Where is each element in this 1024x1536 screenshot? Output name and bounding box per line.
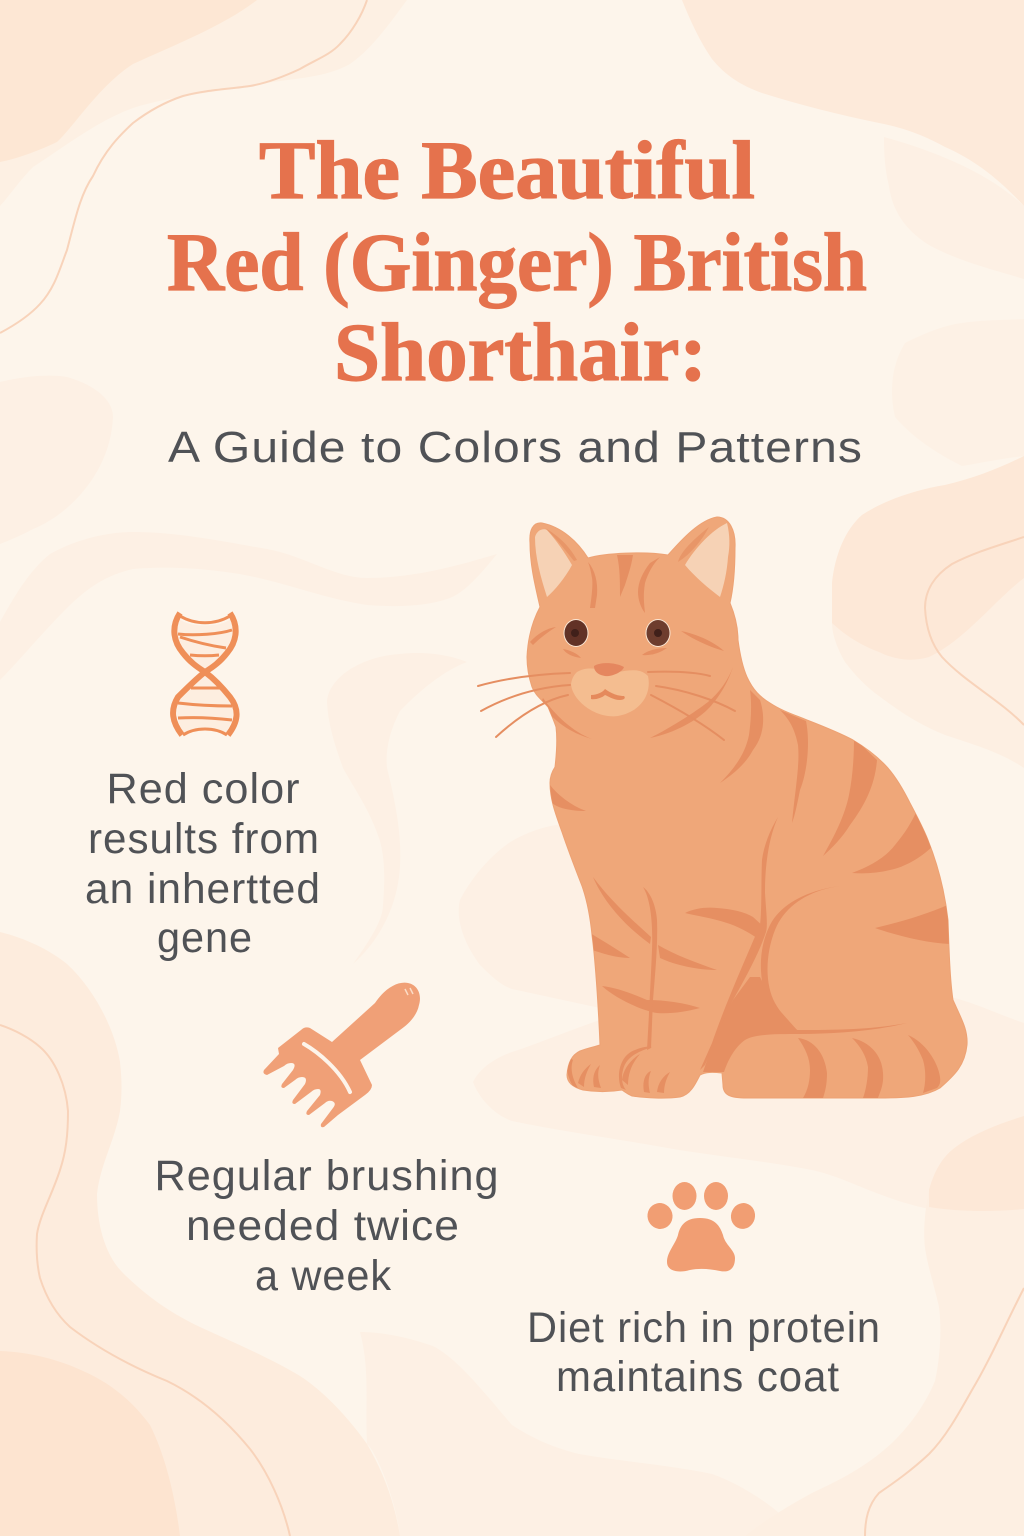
text: red color gene: Red color: [106, 765, 300, 813]
text: brushing: needed twice: [186, 1202, 460, 1250]
text: brushing: [154, 1152, 500, 1300]
text: red color gene: gene: [157, 914, 253, 962]
cat muzzle: [571, 668, 649, 716]
cat ears: [535, 523, 729, 597]
subtitle: A Guide to Colors and Patterns: [168, 423, 863, 472]
cat nose: [594, 663, 624, 676]
cat stripes: [530, 555, 950, 1098]
title: Shorthair:: [334, 306, 707, 398]
text: red color gene: results from: [88, 815, 320, 863]
text: brushing: Regular brushing: [154, 1152, 500, 1200]
cat eyes: [564, 619, 670, 647]
title: [167, 124, 867, 398]
cat body silhouette: [527, 517, 967, 1098]
text: diet: [527, 1304, 881, 1401]
text: brushing: a week: [255, 1252, 392, 1300]
title: The Beautiful: [259, 124, 755, 216]
icon: grooming brush: [263, 983, 420, 1127]
text: red color gene: an inhertted: [85, 865, 321, 913]
cat mouth: [591, 689, 625, 700]
icon: paw print: [645, 1182, 758, 1271]
cat whiskers: [478, 672, 735, 740]
text: diet: Diet rich in protein: [527, 1304, 881, 1352]
icon: DNA helix: [173, 613, 237, 735]
text: red color gene: [85, 765, 321, 962]
title: Red (Ginger) British: [167, 216, 867, 308]
cat illustration: [478, 517, 967, 1098]
text: diet: maintains coat: [556, 1353, 840, 1401]
